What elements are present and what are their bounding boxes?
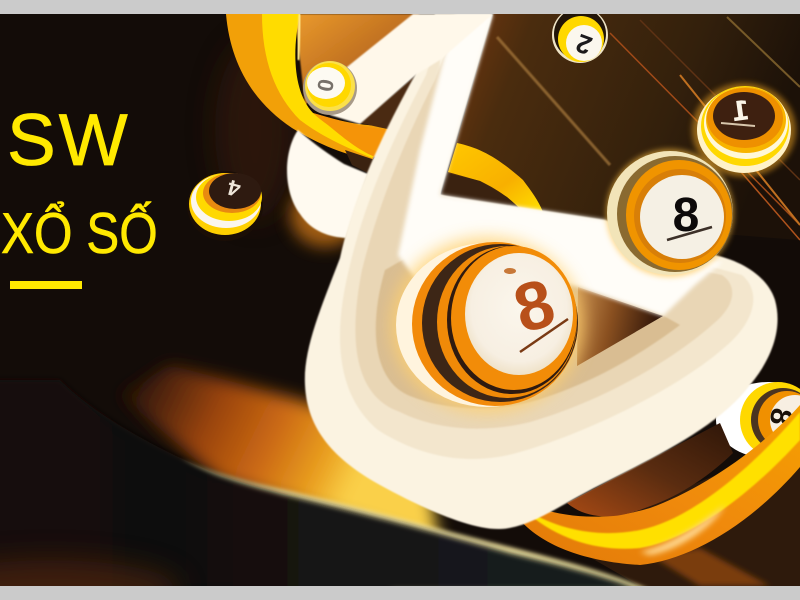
brown gap below ribbon <box>345 150 375 173</box>
white top band <box>330 14 493 124</box>
logo mark <box>504 268 516 274</box>
inner hole <box>577 287 663 366</box>
bottom grey strip <box>0 586 800 600</box>
right background <box>730 240 800 470</box>
ball 2 <box>552 14 608 63</box>
dark wedge <box>130 431 648 586</box>
orange streak lower right <box>650 548 770 586</box>
white band <box>398 14 722 316</box>
ring band middle <box>355 40 732 429</box>
upper golden ribbon left <box>226 14 395 160</box>
ball 2: 2 <box>572 28 596 61</box>
ball 4: 4 <box>224 174 243 202</box>
big ball 8 <box>391 237 583 413</box>
glow behind blob <box>290 183 360 247</box>
ball 1 <box>692 83 796 177</box>
ball 8 medium <box>606 149 734 277</box>
ball 4 <box>189 171 263 235</box>
white loop left <box>287 130 368 238</box>
small ball lower right <box>716 382 800 458</box>
big ball 8: 8 <box>506 264 562 348</box>
light rays <box>497 17 800 240</box>
ball 0 <box>303 61 357 115</box>
lower right brown <box>592 467 800 586</box>
ball 0: 0 <box>312 77 339 94</box>
dark gap under ribbon <box>442 173 513 204</box>
brown glow upper right <box>440 14 800 240</box>
cream ring with spike <box>305 14 778 529</box>
ball 1: 1 <box>729 95 752 128</box>
orange glow lower left <box>120 365 440 545</box>
warm patch bottom left <box>0 560 180 600</box>
orange glow behind top band <box>295 14 420 105</box>
top grey strip <box>0 0 800 14</box>
ring band outer <box>340 30 753 459</box>
ring band inner <box>376 250 680 408</box>
lower golden ribbon <box>520 405 800 565</box>
title SW: SW <box>7 100 131 181</box>
yellow underline <box>10 281 82 289</box>
ribbon right segment <box>448 143 543 212</box>
small ball lower right: 8 <box>763 406 798 428</box>
title xổ số: XỔ SỐ <box>1 202 158 266</box>
dark hole above lower ribbon <box>567 423 733 516</box>
brown haze near ribbon <box>215 40 295 220</box>
ball 8 medium: 8 <box>673 189 699 242</box>
dark gap left <box>360 77 414 130</box>
